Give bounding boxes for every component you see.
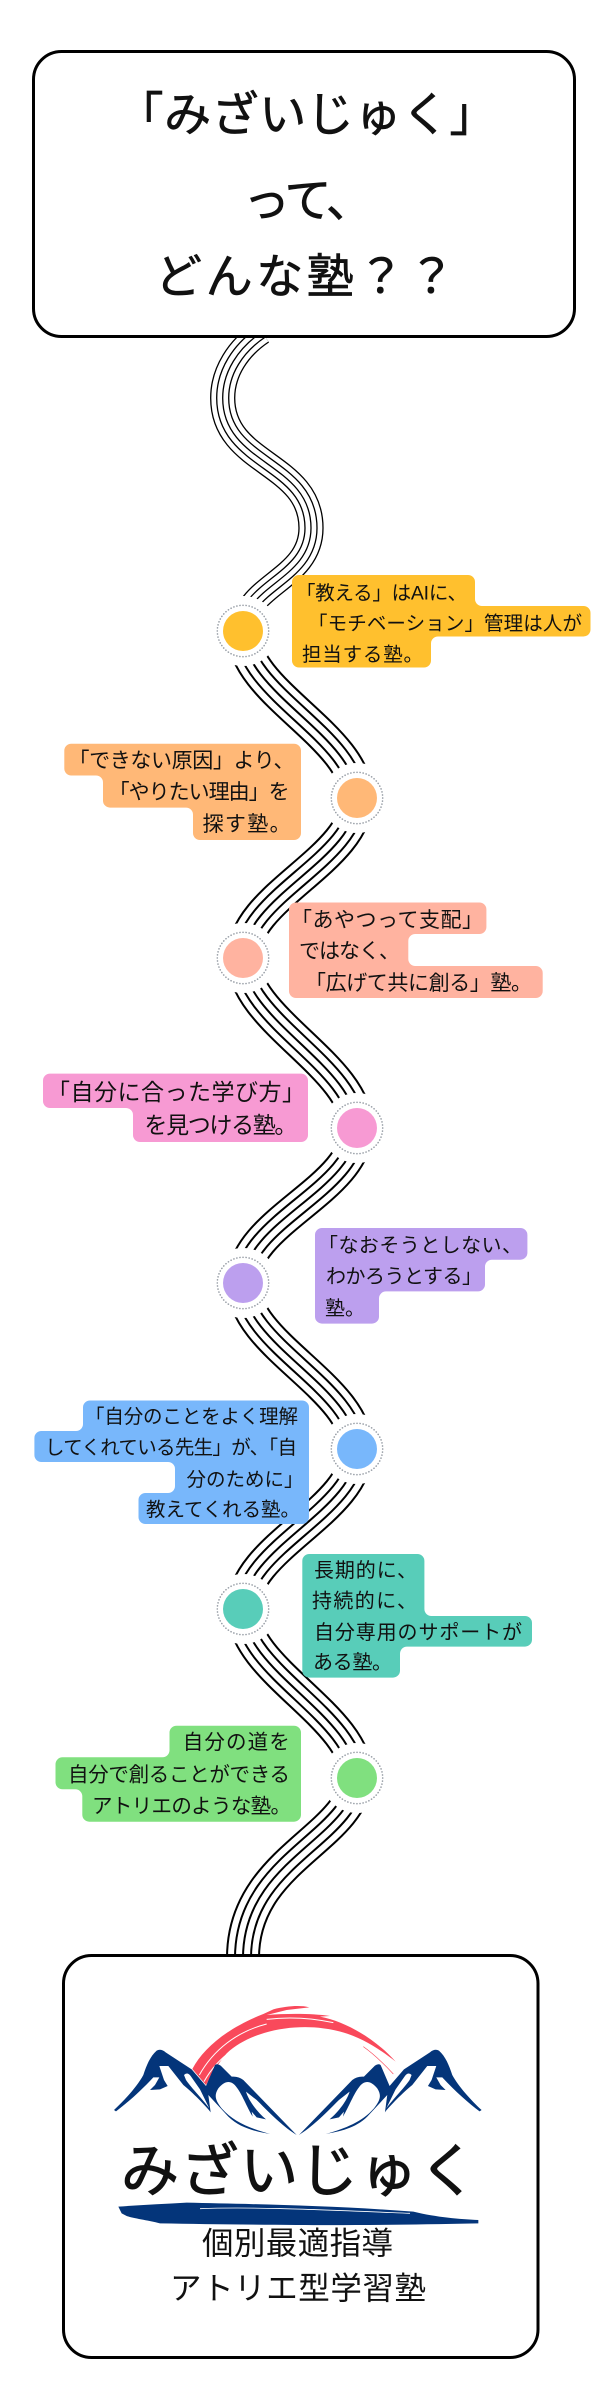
callout: yellow: 担当する塾。 bbox=[302, 644, 423, 666]
callout: purple bbox=[315, 1228, 527, 1324]
callout: blue: 教えてくれる塾。 bbox=[146, 1499, 300, 1521]
callout: orange: 探す塾。 bbox=[203, 813, 291, 836]
node 6: blue circle bbox=[322, 1414, 392, 1484]
callout: orange bbox=[64, 744, 301, 840]
callout: teal: ある塾。 bbox=[313, 1651, 392, 1674]
callout: blue: してくれている先生」が、「自 bbox=[45, 1437, 297, 1459]
node 2: orange circle bbox=[322, 763, 392, 833]
callout: teal bbox=[302, 1554, 532, 1678]
callout: purple: 塾。 bbox=[325, 1297, 365, 1320]
logo subtitle line 1: 個別最適指導 bbox=[202, 2218, 393, 2264]
callout: salmon: 「広げて共に創る」塾。 bbox=[305, 972, 532, 995]
winding road: lower segments bbox=[243, 631, 357, 1958]
title text: 「みざいじゅく」 bbox=[116, 76, 496, 145]
icon: left mountain bbox=[114, 2050, 297, 2135]
callout: teal: 持続的に、 bbox=[312, 1590, 417, 1612]
node 4: pink circle bbox=[322, 1093, 392, 1163]
callout: teal: 自分専用のサポートが bbox=[314, 1621, 522, 1644]
node 7: teal circle bbox=[208, 1574, 278, 1644]
callout: salmon bbox=[289, 902, 543, 998]
node 3: salmon circle bbox=[208, 923, 278, 993]
callout: orange: 「できない原因」より、 bbox=[68, 750, 294, 772]
callout: salmon: 「あやつって支配」 bbox=[291, 909, 483, 932]
callout: blue bbox=[34, 1400, 309, 1524]
logo subtitle line 2: アトリエ型学習塾 bbox=[170, 2263, 426, 2309]
title text: って、 bbox=[243, 162, 373, 231]
panel: title box bbox=[34, 52, 574, 336]
callout: green: 自分の道を bbox=[183, 1731, 290, 1754]
node 5: purple circle bbox=[208, 1248, 278, 1318]
callout: pink: 「自分に合った学び方」 bbox=[47, 1079, 305, 1105]
title text bbox=[116, 76, 496, 307]
callout: yellow bbox=[292, 575, 590, 668]
callout: green: アトリエのような塾。 bbox=[92, 1795, 291, 1818]
icon: navy brush underline bbox=[118, 2203, 478, 2225]
winding road: top segment bbox=[223, 332, 311, 631]
callout: teal: 長期的に、 bbox=[314, 1559, 417, 1582]
node 1: yellow circle bbox=[208, 596, 278, 666]
callout: blue: 「自分のことをよく理解 bbox=[85, 1406, 298, 1428]
callout: pink bbox=[43, 1074, 308, 1142]
callout: orange: 「やりたい理由」を bbox=[109, 781, 290, 804]
logo wordmark: みざいじゅく bbox=[121, 2124, 477, 2208]
callout: blue: 分のために」 bbox=[186, 1469, 304, 1491]
callout: purple: 「なおそうとしない、 bbox=[318, 1234, 522, 1257]
callout: green bbox=[56, 1726, 301, 1822]
node 8: green circle bbox=[322, 1743, 392, 1813]
callout: yellow: 「教える」はAIに、 bbox=[296, 582, 467, 604]
callout: salmon: ではなく、 bbox=[299, 940, 400, 963]
callout: pink: を見つける塾。 bbox=[144, 1112, 297, 1138]
callout: yellow: 「モチベーション」管理は人が bbox=[308, 613, 582, 635]
callout: purple: わかろうとする」 bbox=[326, 1266, 482, 1288]
title text: どんな塾？？ bbox=[155, 238, 455, 307]
icon: red brush arc bbox=[192, 2006, 396, 2085]
icon: right mountain bbox=[299, 2050, 482, 2135]
callout: green: 自分で創ることができる bbox=[68, 1764, 290, 1786]
panel: logo box bbox=[64, 1956, 538, 2358]
